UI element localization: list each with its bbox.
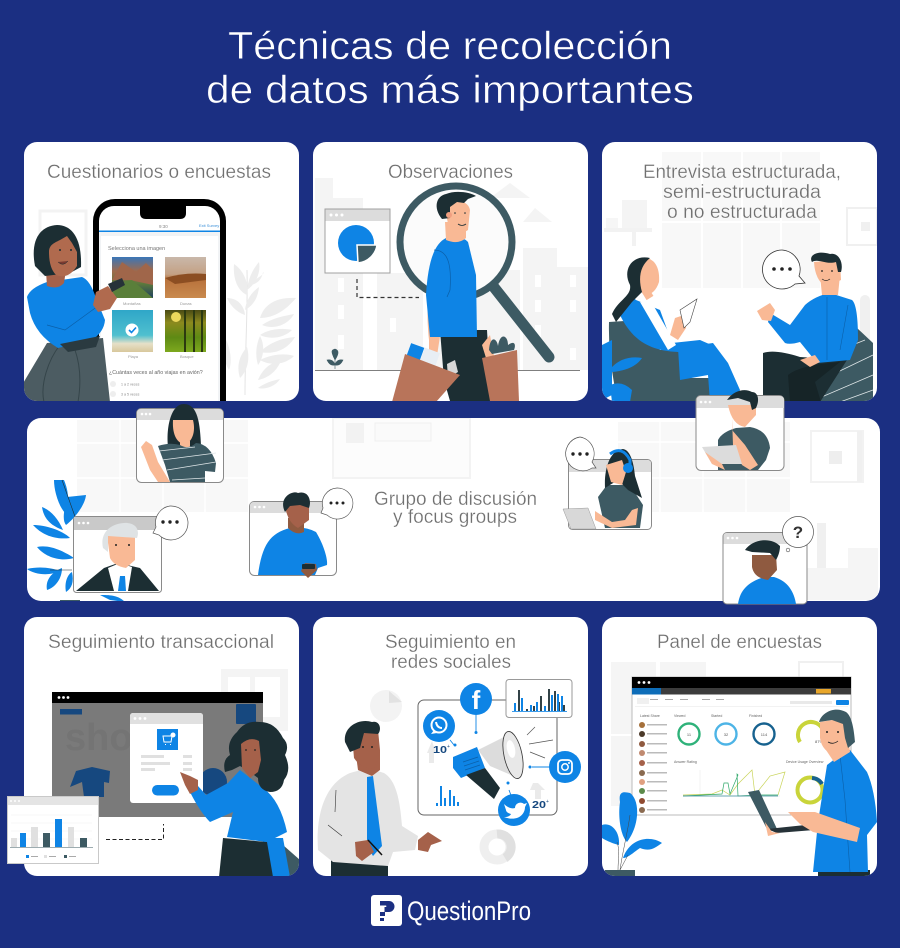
heading: entrevista: Entrevista estructurada,: [643, 162, 841, 183]
heading: grupo de discusión: Grupo de discusión: [374, 489, 537, 510]
shop window: [52, 692, 263, 817]
phone: 1 a 2 veces: [121, 382, 140, 386]
person: man with shopping bags: [392, 192, 519, 402]
icon: whatsapp: [423, 710, 455, 742]
background city: [315, 178, 588, 370]
panel: cuestionarios o encuestas: [24, 142, 299, 401]
panel: grupo de discusión: [27, 418, 880, 602]
heading: seguimiento transaccional: Seguimiento transaccional: [48, 632, 274, 653]
metric rings: [678, 724, 774, 744]
panel: panel de encuestas: [602, 617, 877, 880]
arrows and values: +: [546, 799, 549, 805]
background wall: [604, 200, 877, 340]
person: woman pointing: [180, 722, 300, 880]
phone: Dunas: [180, 301, 192, 306]
icon: facebook: f: [472, 685, 481, 715]
magnifier lens: [400, 186, 512, 298]
phone: Bosque: [180, 354, 194, 359]
icon: P mark: [371, 895, 402, 926]
video window: man with question bubble: ?: [793, 523, 803, 542]
video window: man with question bubble: [723, 516, 814, 604]
small plant: [327, 349, 343, 369]
speech bubble: [566, 437, 596, 471]
heading: grupo de discusión: y focus groups: [393, 507, 517, 528]
dashboard screen: 32: [724, 732, 729, 737]
photo: beach with check: [112, 310, 153, 352]
panel: seguimiento transaccional: [8, 617, 300, 880]
panel: observaciones: [313, 142, 588, 402]
speech bubble: [762, 250, 805, 289]
person: man in armchair: [757, 253, 873, 402]
light donut: [484, 834, 511, 860]
phone: [93, 199, 226, 401]
phone: Montañas: [123, 301, 141, 306]
phone: Selecciona una imagen: [108, 246, 165, 252]
heading: entrevista: semi-estructurada: [663, 182, 821, 203]
heading: grupo de discusión: [374, 489, 537, 528]
heading: redes sociales: [385, 632, 516, 673]
arrows and values: 20: [532, 799, 546, 811]
heading: observaciones: Observaciones: [388, 162, 513, 183]
dashboard screen: Viewed: [674, 714, 685, 718]
speech bubble: [153, 506, 188, 540]
heading: panel de encuestas: Panel de encuestas: [657, 632, 822, 653]
photo: forest: [165, 310, 206, 352]
title: [206, 25, 694, 112]
donut chart: [798, 778, 822, 802]
laptop: [748, 790, 777, 829]
blue plant: [27, 480, 125, 602]
shopping bags: [392, 354, 460, 402]
arrows and values: 10: [433, 744, 447, 756]
blue plant: [602, 792, 662, 877]
dashboard screen: Finished: [749, 714, 762, 718]
video window: man with phone and bubble: [250, 488, 353, 578]
person: woman with phone: [22, 225, 125, 402]
logo: QuestionPro: [371, 895, 531, 926]
decorative leaves: [224, 262, 296, 395]
respondent list: [639, 722, 667, 813]
video window: thinking man with tablet: [696, 390, 784, 470]
icon: twitter: [498, 794, 530, 826]
video window: older man with bubble: [74, 506, 188, 592]
video window: woman with headphones: [563, 437, 652, 530]
small bar chart: [437, 786, 458, 806]
phone: ¿Cuántas veces al año viajas en avión?: [109, 370, 203, 376]
dashboard screen: Latest Share: [640, 714, 660, 718]
shop window: shop: [65, 717, 156, 759]
title: Técnicas de recolección: [228, 25, 672, 68]
heading: redes sociales: redes sociales: [391, 652, 511, 673]
chart window: pie: [325, 209, 390, 273]
question bubble: [782, 516, 814, 548]
heading: entrevista: o no estructurada: [667, 202, 817, 223]
dashboard screen: Started: [711, 714, 722, 718]
megaphone: [453, 730, 527, 799]
photo: desert: [165, 257, 206, 298]
icon: instagram: [549, 751, 581, 783]
dashboard screen: Answer Rating: [674, 760, 697, 764]
person: man in shirt and tie: [318, 721, 442, 880]
dashboard screen: 87%: [815, 739, 823, 744]
person: man with laptop: [748, 710, 877, 880]
background wall: [332, 418, 878, 600]
bar chart box: [506, 680, 572, 718]
phone: Exit Survey: [199, 223, 219, 228]
photo: mountains: [112, 257, 153, 298]
line chart: [683, 770, 785, 796]
person: interviewer woman in armchair: [602, 257, 740, 402]
purchase popup: [130, 713, 203, 803]
phone: 3 a 5 veces: [121, 392, 140, 396]
dashboard screen: 114: [761, 732, 768, 737]
phone: Playa: [128, 354, 139, 359]
bar chart window: [8, 796, 98, 864]
magnifier handle: [493, 286, 549, 357]
phone: 9:30: [159, 224, 168, 229]
title: de datos más importantes: [206, 69, 694, 112]
dashboard screen: [632, 677, 851, 815]
heading: cuestionarios: Cuestionarios o encuestas: [47, 162, 271, 183]
heading: entrevista: [643, 162, 841, 223]
light pie: [370, 690, 402, 722]
icon: facebook: [460, 683, 492, 715]
arrows and values: [427, 741, 549, 811]
campaign frame: [418, 700, 557, 815]
dashboard screen: 11: [687, 732, 692, 737]
speech bubble: [321, 488, 353, 519]
panel: entrevista: [602, 142, 877, 402]
panel: seguimiento en redes sociales: [313, 617, 588, 880]
dashboard screen: Device Usage Overview: [786, 760, 824, 764]
completion gauge: [798, 722, 822, 742]
video window: waving woman: [136, 404, 224, 482]
heading: redes sociales: Seguimiento en: [385, 632, 516, 653]
logo: QuestionPro: QuestionPro: [407, 896, 531, 926]
arrows and values: +: [447, 744, 450, 750]
